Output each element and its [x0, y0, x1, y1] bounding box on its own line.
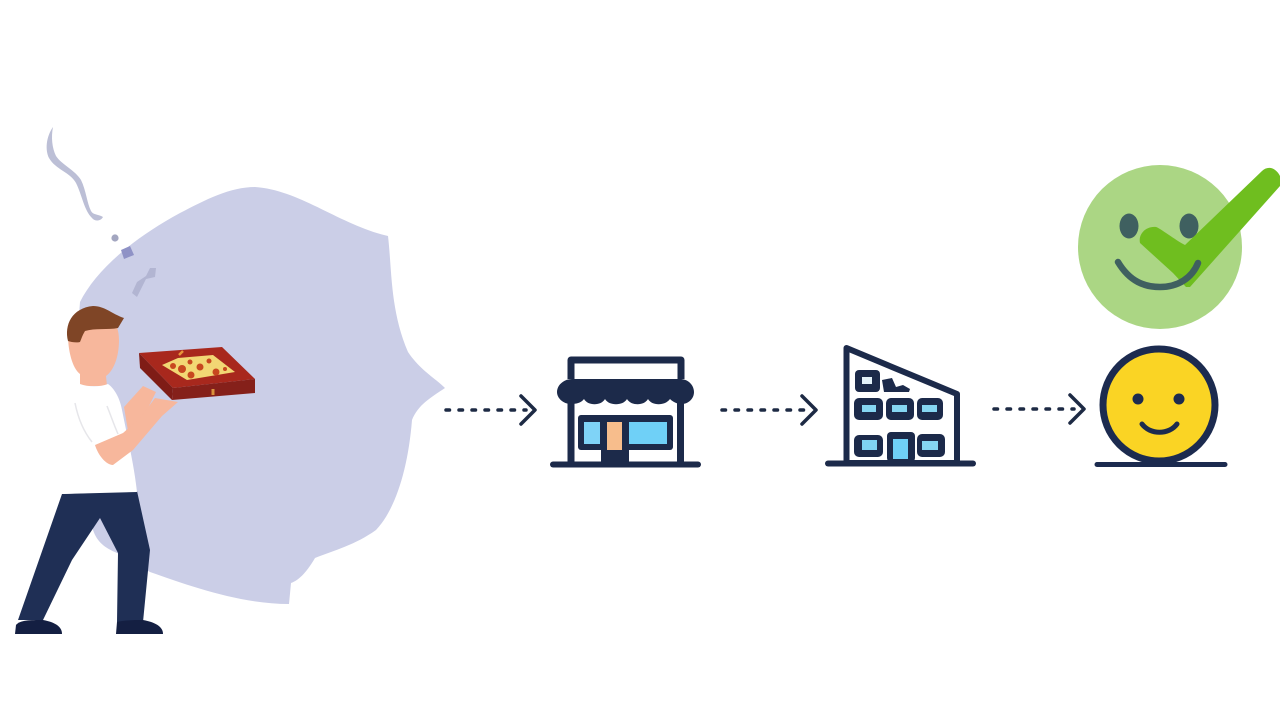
- neck and head: [68, 315, 119, 386]
- arrow 1: [446, 396, 535, 424]
- hair: [67, 306, 124, 342]
- back arm: [124, 386, 156, 431]
- check mark: [1140, 168, 1280, 287]
- lavender blob: [79, 187, 445, 604]
- icon: shop: [553, 360, 698, 464]
- arrow 3: [994, 395, 1084, 423]
- person holding pizza: [15, 306, 255, 634]
- legs: [18, 491, 150, 622]
- sleeve line: [75, 403, 118, 442]
- torso: [61, 384, 137, 494]
- shoes: [15, 620, 62, 634]
- pizza box: [139, 347, 255, 400]
- smoke wisps: [47, 127, 156, 297]
- icon: green smiley with check mark: [1078, 165, 1280, 329]
- icon: office building: [828, 348, 973, 464]
- front arm: [95, 398, 178, 465]
- arrow 2: [722, 396, 816, 424]
- icon: yellow smiley: [1097, 349, 1225, 464]
